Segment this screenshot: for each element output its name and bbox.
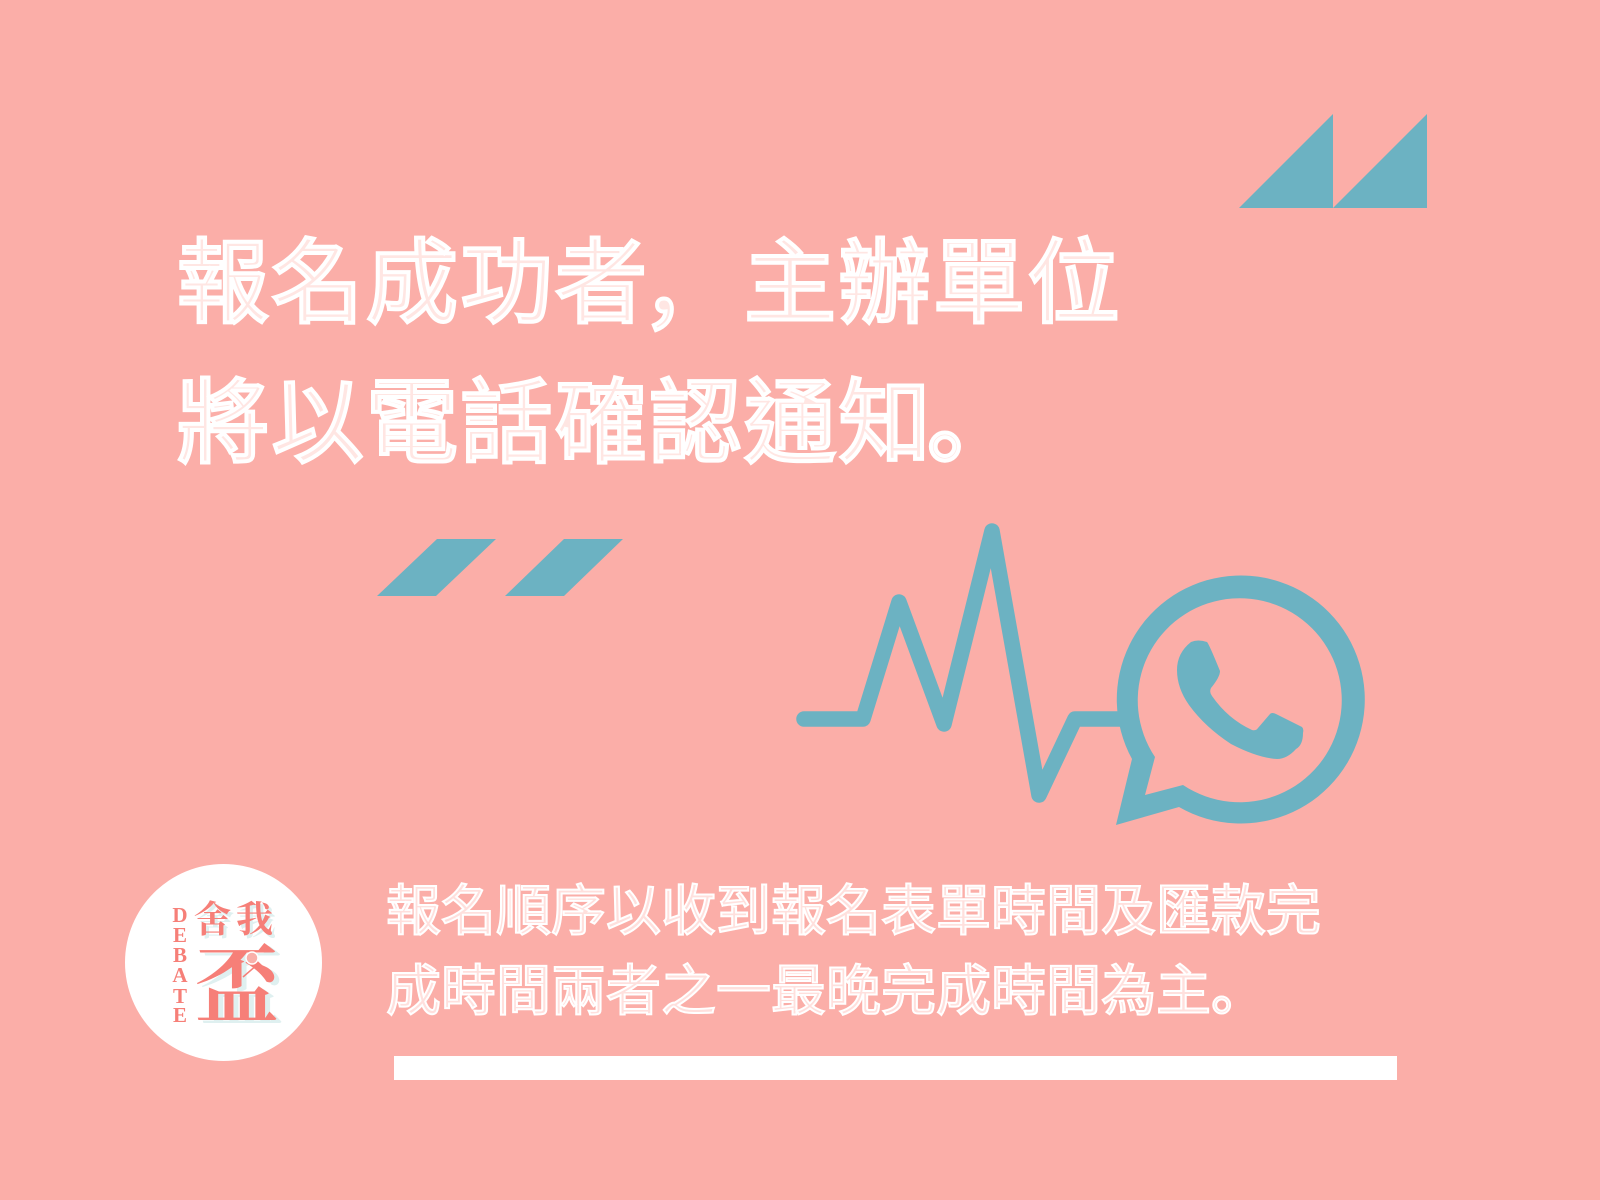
phone handset bbox=[1177, 640, 1303, 759]
icon: heartbeat line into phone bubble bbox=[804, 531, 1365, 825]
logo microphone bbox=[243, 952, 268, 977]
logo characters: 舍 bbox=[194, 899, 231, 941]
white bar bbox=[394, 1056, 1397, 1080]
logo characters: 我 bbox=[236, 900, 273, 941]
note text bbox=[386, 880, 1321, 1022]
logo shadow characters bbox=[197, 902, 289, 1037]
title line 2: 將以電話確認通知。 bbox=[177, 373, 1022, 475]
title bbox=[177, 233, 1122, 475]
heartbeat line bbox=[804, 531, 1124, 795]
logo vertical word DEBATE bbox=[172, 903, 188, 1027]
logo characters: 盃 bbox=[195, 941, 284, 1034]
logo white circle bbox=[125, 864, 322, 1061]
logo shadow characters: 我 bbox=[239, 903, 276, 944]
logo vertical word DEBATE: E bbox=[173, 923, 187, 947]
logo vertical word DEBATE: D bbox=[172, 903, 188, 927]
note line 2: 成時間兩者之一最晚完成時間為主。 bbox=[386, 960, 1266, 1022]
logo vertical word DEBATE: B bbox=[173, 943, 187, 967]
logo shadow characters: 舍 bbox=[197, 902, 234, 944]
logo vertical word DEBATE: T bbox=[173, 984, 187, 1008]
logo characters bbox=[194, 899, 284, 1034]
speech bubble ring bbox=[1116, 575, 1365, 825]
note line 1: 報名順序以收到報名表單時間及匯款完 bbox=[386, 880, 1321, 942]
icon: double parallelograms bbox=[377, 539, 623, 596]
logo shadow characters: 盃 bbox=[200, 944, 289, 1037]
logo vertical word DEBATE: A bbox=[172, 963, 188, 987]
logo vertical word DEBATE: E bbox=[173, 1003, 187, 1027]
title line 1: 報名成功者，主辦單位 bbox=[177, 233, 1122, 340]
icon: top-right double triangles bbox=[1239, 114, 1427, 208]
